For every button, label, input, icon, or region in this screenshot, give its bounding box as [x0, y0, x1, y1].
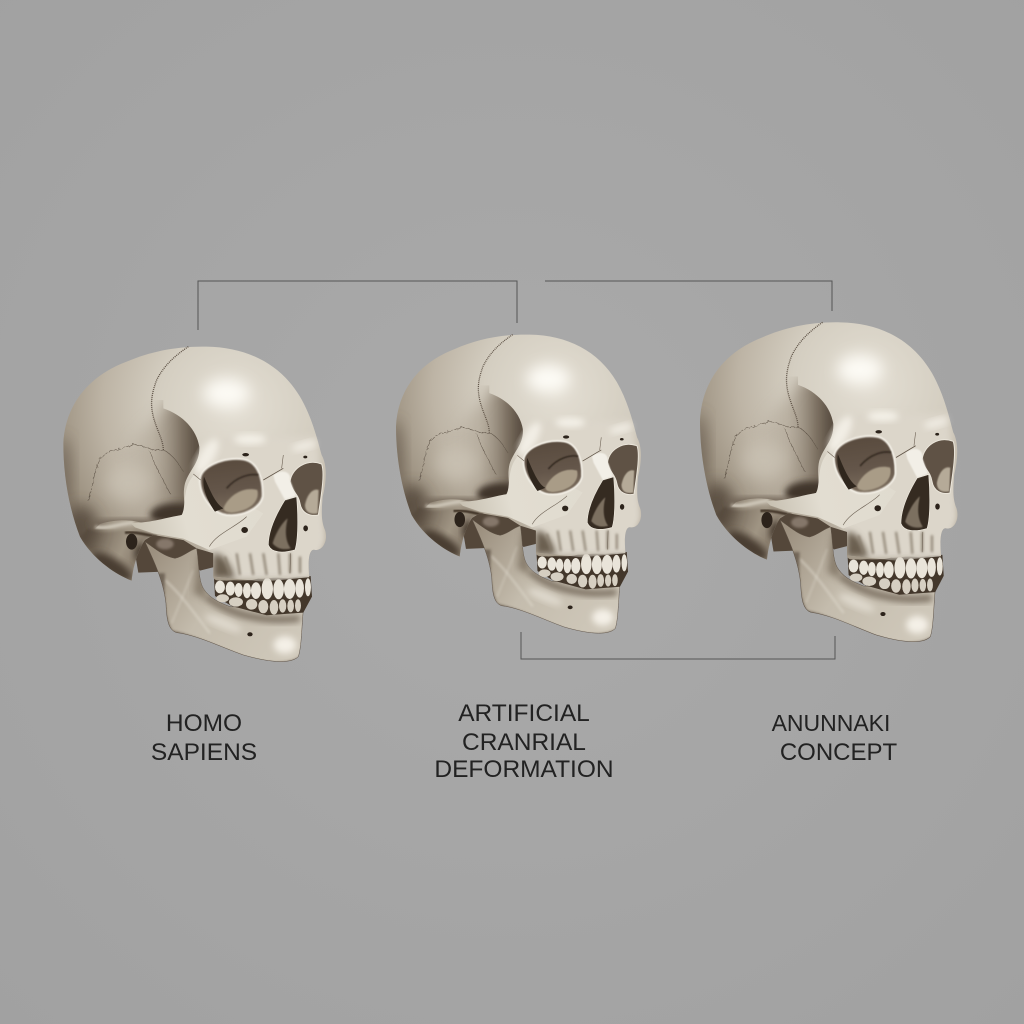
label: anunnaki concept: ANUNNAKI: [772, 710, 890, 736]
label: anunnaki concept: CONCEPT: [780, 739, 898, 766]
skull: artificial cranial deformation: [384, 328, 642, 641]
skull: homo sapiens: [50, 340, 327, 670]
bracket: homo sapiens to artificial deformation: [198, 281, 517, 330]
bracket: lower artificial deformation to anunnaki concept: [521, 632, 835, 659]
label: artificial cranial deformation: DEFORMATION: [434, 756, 614, 783]
label: artificial cranial deformation: CRANRIAL: [462, 729, 586, 756]
skull: anunnaki concept: [687, 316, 958, 650]
label: artificial cranial deformation: ARTIFICIAL: [458, 700, 590, 727]
bracket: top line to anunnaki concept: [545, 281, 832, 311]
label: homo sapiens: SAPIENS: [151, 739, 257, 766]
label: homo sapiens: HOMO: [166, 710, 242, 737]
